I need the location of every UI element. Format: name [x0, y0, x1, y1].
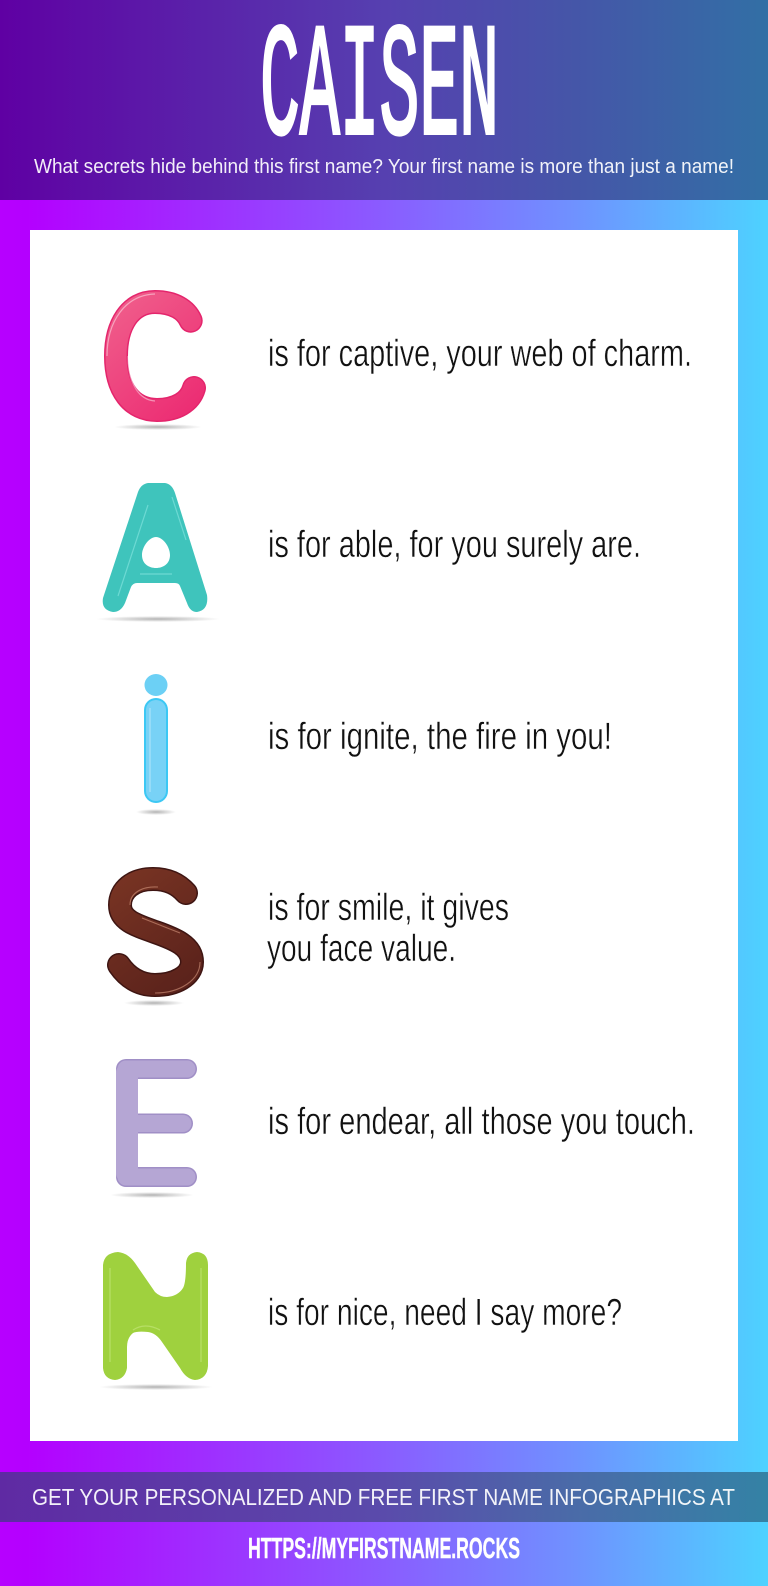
text: S lines: is for smile, it gives — [268, 887, 509, 929]
row N — [99, 1252, 622, 1390]
row S — [119, 879, 509, 1006]
text: S lines — [267, 887, 509, 970]
icon: letter C — [107, 294, 202, 430]
header band — [0, 0, 768, 200]
row C — [107, 294, 692, 430]
text: A line: is for able, for you surely are. — [268, 524, 641, 566]
icon: letter E — [110, 1066, 194, 1198]
footer band — [0, 1472, 768, 1522]
icon: letter S — [119, 879, 200, 1006]
text: N line: is for nice, need I say more? — [268, 1292, 622, 1334]
row E — [110, 1066, 695, 1198]
icon: letter A — [96, 483, 220, 622]
text: I line: is for ignite, the fire in you! — [268, 716, 612, 758]
icon: letter i — [136, 674, 176, 815]
row A — [96, 483, 641, 622]
text: S lines: you face value. — [267, 928, 456, 970]
subtitle: What secrets hide behind this first name? Your first name is more than just a name! — [34, 155, 734, 178]
icon: letter N — [99, 1252, 213, 1390]
panel: white letters card — [30, 230, 738, 1441]
footer url: HTTPS://MYFIRSTNAME.ROCKS — [248, 1533, 520, 1565]
row I — [136, 674, 612, 815]
